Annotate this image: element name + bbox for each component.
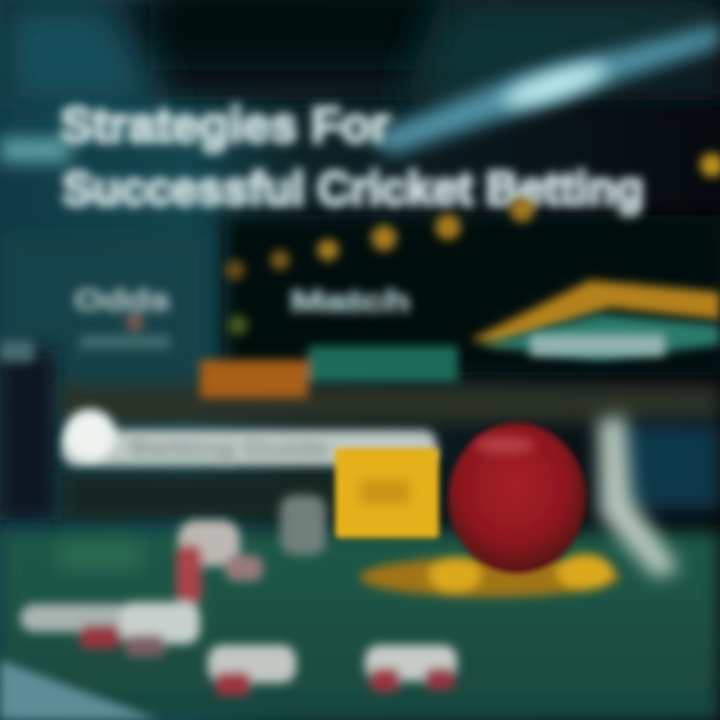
title bbox=[60, 97, 644, 216]
stat labels bbox=[0, 284, 410, 362]
row of yellow lights bbox=[225, 153, 720, 335]
cricket ball bbox=[448, 423, 586, 573]
title: Successful Cricket Betting bbox=[62, 163, 644, 216]
scattered pills and tokens bbox=[20, 495, 457, 696]
stat labels: Odds bbox=[74, 284, 170, 317]
yellow and green chart roof bbox=[470, 280, 720, 360]
yellow box bbox=[335, 448, 439, 538]
cricket bat bbox=[598, 415, 680, 578]
white bar label: Betting Guide bbox=[130, 433, 330, 463]
title: Strategies For bbox=[60, 97, 390, 153]
orange and green bar bbox=[200, 346, 458, 398]
white bar label bbox=[62, 409, 437, 466]
stat labels: Match bbox=[290, 285, 410, 318]
light streak bbox=[0, 24, 720, 162]
pitch bbox=[0, 532, 720, 720]
ball base bbox=[360, 554, 620, 597]
